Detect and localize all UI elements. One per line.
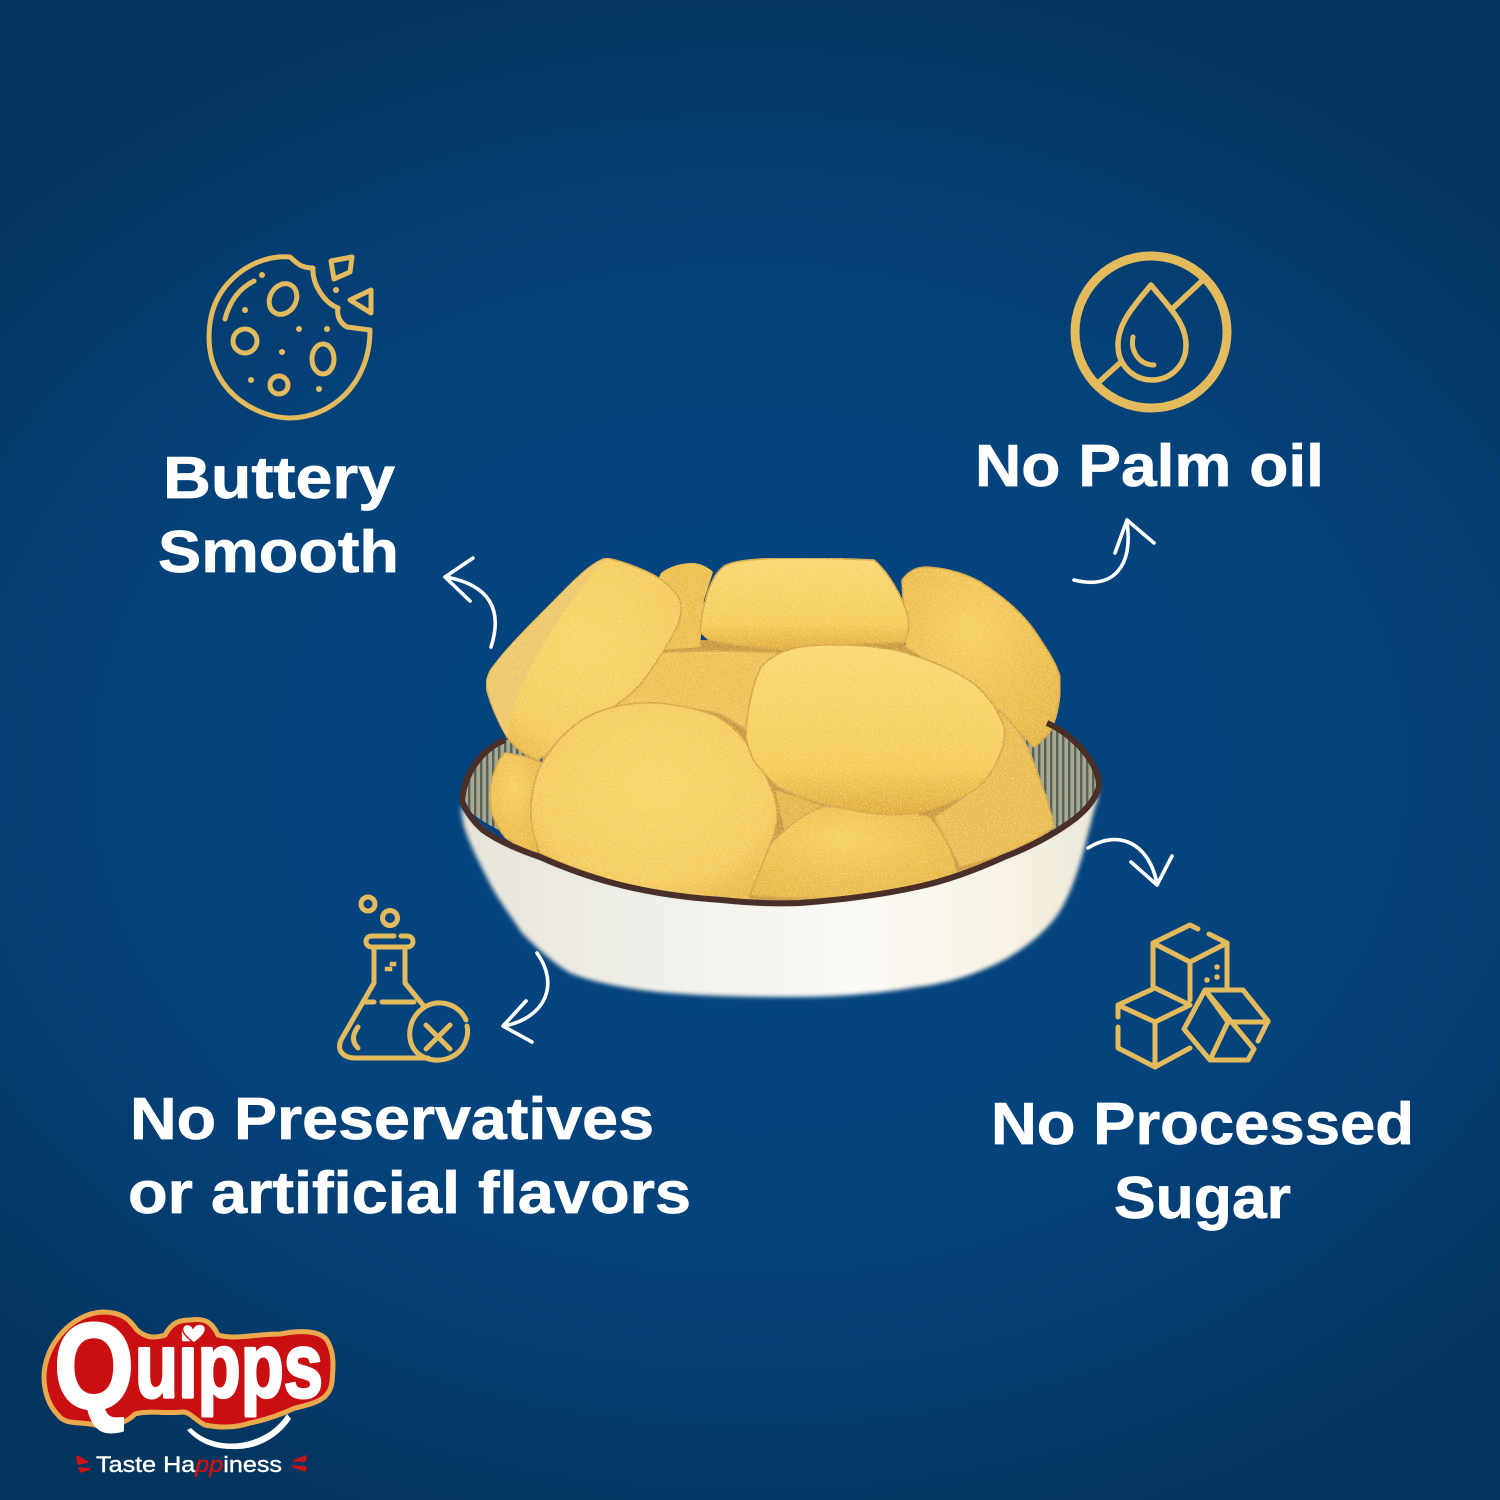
logo heart: [183, 1324, 205, 1343]
heading: Buttery Smooth: Smooth: [158, 519, 399, 585]
logo: Quipps: [44, 1298, 333, 1477]
bowl interior: [461, 723, 1099, 903]
icon: sugar cubes: [1118, 925, 1268, 1067]
icon: cookie: [209, 257, 371, 418]
icon: flask with cross: [340, 897, 468, 1060]
logo wordmark: uipps: [135, 1315, 323, 1417]
arrow: to no processed sugar: [1088, 840, 1172, 885]
feature: buttery smooth: [158, 257, 399, 585]
logo wordmark: Q: [54, 1298, 134, 1434]
feature: no palm oil: [975, 256, 1324, 499]
logo splashes: [77, 1456, 306, 1472]
logo badge: [44, 1312, 333, 1427]
arrow: to buttery smooth: [445, 558, 495, 647]
feature: no processed sugar: [991, 925, 1414, 1231]
cookies: [486, 558, 1060, 908]
bowl body: [460, 787, 1099, 997]
logo smile: [187, 1414, 291, 1449]
icon: crossed oil drop: [1075, 256, 1227, 408]
bowl of cookies: [460, 558, 1099, 997]
heading: No Palm oil: No Palm oil: [975, 433, 1324, 499]
feature: no preservatives: [128, 897, 691, 1226]
heading: No Preservatives or artificial flavors: No Preservatives: [130, 1086, 654, 1152]
bowl rim: [462, 723, 1099, 903]
heading: No Processed Sugar: Sugar: [1114, 1165, 1291, 1231]
heading: No Preservatives or artificial flavors: or artificial flavors: [128, 1160, 691, 1226]
arrow: to no preservatives: [503, 953, 548, 1042]
logo tagline: Taste Ha ppiness: [96, 1452, 282, 1477]
arrow: to no palm oil: [1074, 520, 1154, 582]
heading: Buttery Smooth: Buttery: [163, 445, 395, 511]
heading: No Processed Sugar: No Processed: [991, 1091, 1414, 1157]
